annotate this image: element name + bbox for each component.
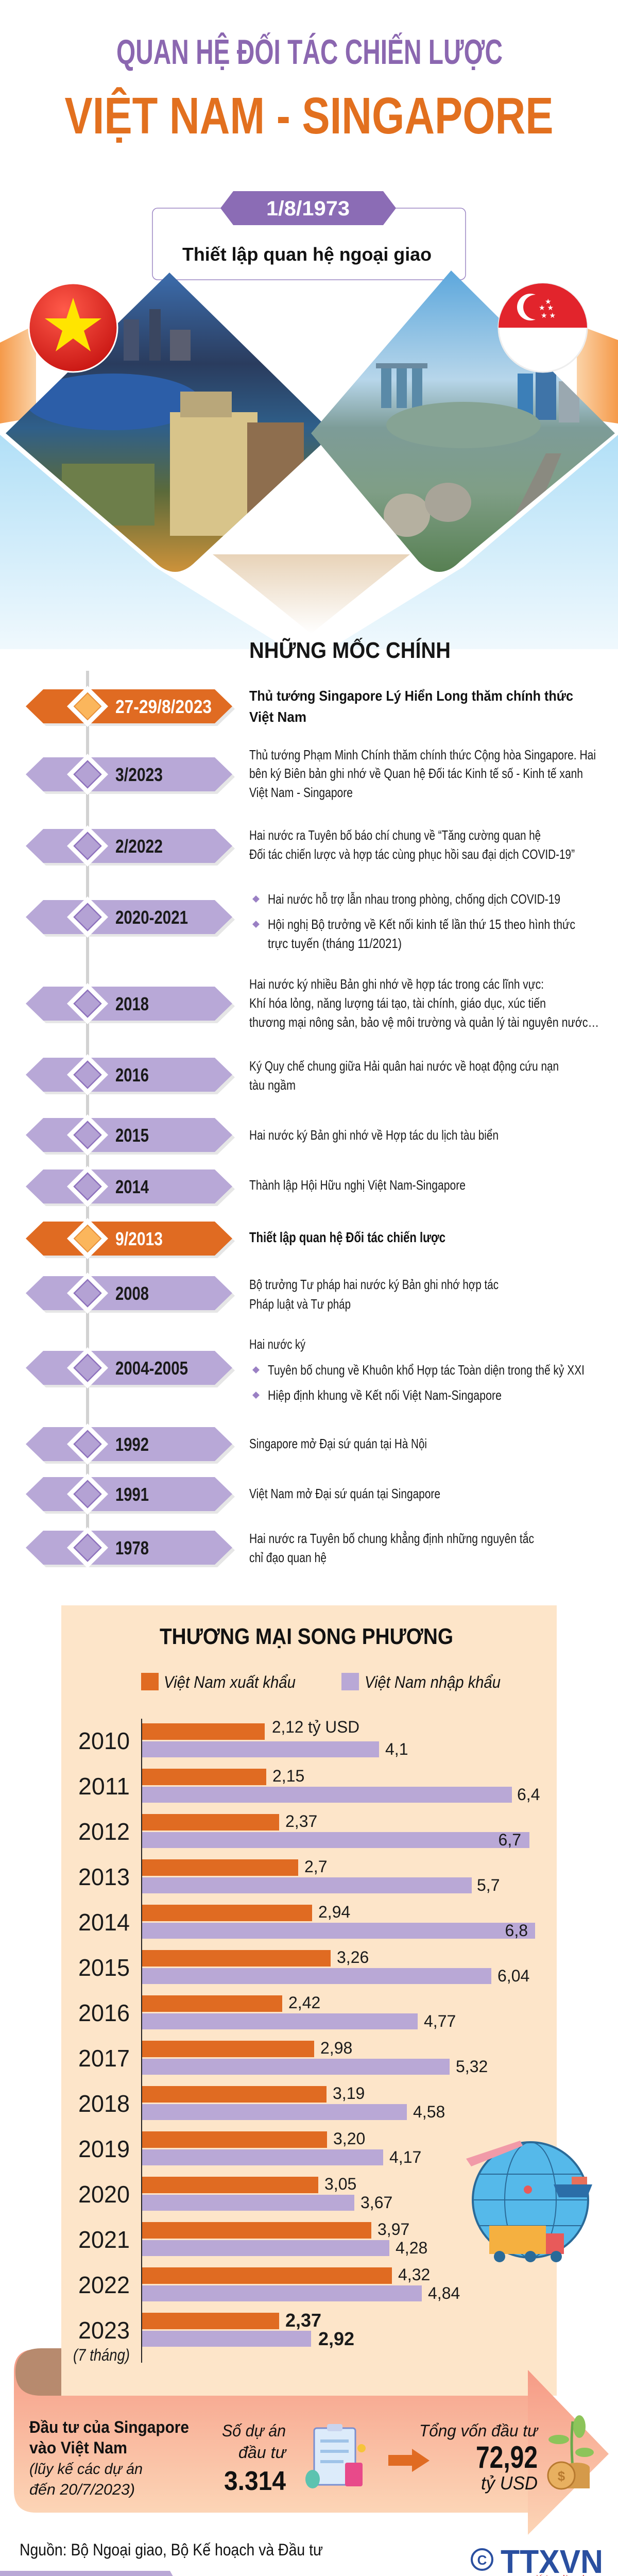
investment label: đến 20/7/2023)	[29, 2481, 135, 2498]
timeline: 9/2013	[26, 1218, 445, 1259]
stat: number of projects: 3.314	[224, 2466, 286, 2496]
date box: 1/8/1973 establishing diplomatic relations: Thiết lập quan hệ ngoại giao	[182, 244, 432, 265]
timeline: 2008: Bộ trưởng Tư pháp hai nước ký Bản ghi nhớ hợp tác	[249, 1277, 499, 1292]
bar chart: 3,97	[377, 2220, 409, 2239]
bar chart: 2016	[78, 1999, 130, 2026]
timeline: 2004-2005: Hai nước ký	[249, 1336, 305, 1352]
bar chart: 2,92	[318, 2328, 354, 2349]
stat: number of projects: Số dự án	[222, 2421, 286, 2440]
bar chart: 2018	[78, 2090, 130, 2117]
bar chart: 2,15	[272, 1767, 304, 1785]
investment label: Đầu tư của Singapore	[29, 2418, 189, 2436]
bar chart: 3,67	[360, 2193, 392, 2212]
stat: total investment	[419, 2421, 539, 2494]
bar chart: 3,19	[333, 2084, 365, 2103]
photo: Singapore	[309, 268, 618, 587]
panel: bilateral trade chart	[61, 1605, 557, 2396]
timeline: 27-29/8/2023: Thủ tướng Singapore Lý Hiển Long thăm chính thức	[249, 688, 573, 704]
timeline: 1978: chỉ đạo quan hệ	[249, 1550, 327, 1565]
bar chart: 2,94	[318, 1903, 350, 1921]
timeline: 2020-2021: 2020-2021	[115, 907, 188, 928]
flag: Singapore: ★ ★	[539, 303, 554, 312]
stat: number of projects: đầu tư	[238, 2443, 287, 2462]
timeline: 2/2022: 2/2022	[115, 836, 163, 857]
stat: total investment: 72,92	[476, 2440, 538, 2475]
legend	[141, 1673, 501, 1691]
heading: milestones: NHỮNG MỐC CHÍNH	[249, 637, 451, 663]
timeline: 2004-2005	[26, 1336, 585, 1403]
timeline: 2015	[26, 1114, 499, 1156]
bar chart: 6,04	[497, 1967, 529, 1985]
arrow: orange	[388, 2449, 430, 2472]
timeline: 3/2023	[26, 747, 596, 800]
bar chart: 2014	[78, 1909, 130, 1936]
bar chart: 2023	[78, 2317, 130, 2344]
bar chart: 2,42	[288, 1993, 320, 2012]
bar chart: 3,20	[333, 2129, 365, 2148]
icon: plant and coins: $	[558, 2468, 565, 2484]
timeline axis line	[86, 671, 89, 1567]
date box: 1/8/1973 establishing diplomatic relations: 1/8/1973	[266, 197, 350, 220]
bar chart: 2021	[78, 2226, 130, 2253]
timeline: 2018	[26, 976, 599, 1030]
timeline: 2014: Thành lập Hội Hữu nghị Việt Nam-Singapore	[249, 1177, 466, 1193]
timeline: 2018: 2018	[115, 993, 149, 1014]
icon: globe with logistics	[466, 2141, 592, 2262]
bar chart: 2,98	[320, 2039, 352, 2057]
bar chart: 6,4	[517, 1785, 540, 1804]
timeline: 2015: 2015	[115, 1125, 149, 1146]
timeline: 2004-2005: Hiệp định khung về Kết nối Việt Nam-Singapore	[268, 1387, 502, 1403]
flag: Singapore: ★ ★	[541, 311, 556, 319]
timeline: 2016: tàu ngầm	[249, 1077, 296, 1093]
stat: total investment: Tổng vốn đầu tư	[419, 2421, 539, 2440]
timeline: 2018: Hai nước ký nhiều Bản ghi nhớ về hợp tác trong các lĩnh vực:	[249, 976, 544, 992]
timeline: 2/2022	[26, 825, 575, 867]
bar chart: 6,8	[505, 1921, 528, 1940]
bar chart: 4,84	[428, 2284, 460, 2302]
flag: Singapore: ★	[545, 297, 552, 306]
timeline: 2014	[26, 1166, 466, 1207]
chart title: THƯƠNG MẠI SONG PHƯƠNG	[160, 1624, 453, 1649]
timeline: 9/2013: Thiết lập quan hệ Đối tác chiến lược	[249, 1229, 445, 1245]
stat: total investment: tỷ USD	[481, 2472, 538, 2494]
bar chart: 2,7	[304, 1857, 327, 1876]
bar chart: 3,26	[337, 1948, 369, 1967]
investment label	[29, 2418, 189, 2498]
bar chart: 5,7	[477, 1876, 500, 1894]
bar chart: 4,1	[385, 1740, 408, 1758]
bar chart: 2020	[78, 2181, 130, 2208]
bar chart	[73, 1718, 540, 2364]
timeline: 2020-2021: trực tuyến (tháng 11/2021)	[268, 936, 402, 951]
timeline: 1992	[26, 1423, 427, 1465]
investment label: vào Việt Nam	[29, 2438, 127, 2457]
bar chart: (7 tháng)	[73, 2346, 130, 2364]
timeline: 1992: Singapore mở Đại sứ quán tại Hà Nội	[249, 1436, 427, 1451]
bar chart: 2022	[78, 2272, 130, 2298]
timeline: 1991	[26, 1473, 440, 1515]
bar chart: 2019	[78, 2136, 130, 2162]
bar chart: 2,37	[285, 2310, 321, 2331]
bar chart: 2010	[78, 1727, 130, 1754]
bar chart: 2017	[78, 2045, 130, 2072]
bar chart: 2011	[78, 1773, 130, 1800]
timeline: 2008: Pháp luật và Tư pháp	[249, 1296, 351, 1312]
timeline: 2020-2021	[26, 891, 575, 951]
timeline: 2016	[26, 1054, 559, 1095]
bar chart: 4,77	[424, 2012, 456, 2030]
timeline: 27-29/8/2023: Việt Nam	[249, 709, 306, 725]
timeline: 1991: 1991	[115, 1484, 149, 1505]
stat: number of projects	[222, 2421, 287, 2496]
bar chart: 4,58	[413, 2103, 445, 2121]
background bands and light blue shapes	[0, 325, 618, 649]
timeline: 2004-2005: 2004-2005	[115, 1358, 188, 1379]
bar chart: 6,7	[499, 1831, 521, 1849]
legend: Việt Nam nhập khẩu	[365, 1673, 501, 1691]
timeline: 1978: Hai nước ra Tuyên bố chung khẳng định những nguyên tắc	[249, 1530, 534, 1546]
bar chart: 2015	[78, 1954, 130, 1981]
bar chart: 2013	[78, 1863, 130, 1890]
source note: Nguồn: Bộ Ngoại giao, Bộ Kế hoạch và Đầu tư	[20, 2540, 323, 2559]
investment arrow head	[528, 2370, 609, 2535]
bar chart: 4,28	[396, 2239, 427, 2257]
timeline: 2018: Khí hóa lỏng, năng lượng tái tạo, tài chính, giáo dục, xúc tiến	[249, 995, 546, 1011]
bar chart: 4,17	[389, 2148, 421, 2166]
brown rolled edge	[15, 2348, 64, 2396]
timeline: 2/2022: Hai nước ra Tuyên bố báo chí chung về “Tăng cường quan hệ	[249, 827, 541, 843]
timeline: 9/2013: 9/2013	[115, 1228, 163, 1249]
timeline: 1978	[26, 1527, 534, 1568]
timeline: 2015: Hai nước ký Bản ghi nhớ về Hợp tác du lịch tàu biển	[249, 1127, 499, 1143]
icon: clipboard and calculator	[305, 2424, 366, 2488]
timeline: 1991: Việt Nam mở Đại sứ quán tại Singapore	[249, 1486, 440, 1501]
bar chart: 2012	[78, 1818, 130, 1845]
timeline: 3/2023: 3/2023	[115, 764, 163, 785]
timeline: 27-29/8/2023	[26, 686, 573, 727]
timeline: 2008	[26, 1273, 499, 1314]
bar chart: 4,32	[398, 2265, 430, 2284]
timeline: 27-29/8/2023: 27-29/8/2023	[115, 696, 212, 717]
investment arrow body	[14, 2349, 530, 2513]
timeline: 1978: 1978	[115, 1537, 149, 1558]
flag: Singapore	[499, 283, 587, 372]
icon: plant and coins	[548, 2415, 594, 2489]
flag: Vietnam	[29, 283, 117, 372]
bar chart: 2,37	[285, 1812, 317, 1831]
logo: TTXVN: C	[477, 2552, 487, 2568]
photo: Hanoi	[6, 273, 321, 572]
bar chart: 5,32	[456, 2057, 488, 2076]
bar chart: 2,12 tỷ USD	[272, 1718, 359, 1736]
legend: Việt Nam xuất khẩu	[164, 1673, 296, 1691]
timeline: 3/2023: Việt Nam - Singapore	[249, 785, 353, 800]
bar chart: 3,05	[324, 2175, 356, 2193]
timeline: 2014: 2014	[115, 1176, 149, 1197]
investment label: (lũy kế các dự án	[29, 2461, 143, 2478]
timeline: 2016: 2016	[115, 1064, 149, 1086]
footer band with url	[0, 2571, 618, 2576]
date box: 1/8/1973 establishing diplomatic relations	[152, 191, 466, 280]
timeline: 1992: 1992	[115, 1434, 149, 1455]
timeline: 2008: 2008	[115, 1283, 149, 1304]
